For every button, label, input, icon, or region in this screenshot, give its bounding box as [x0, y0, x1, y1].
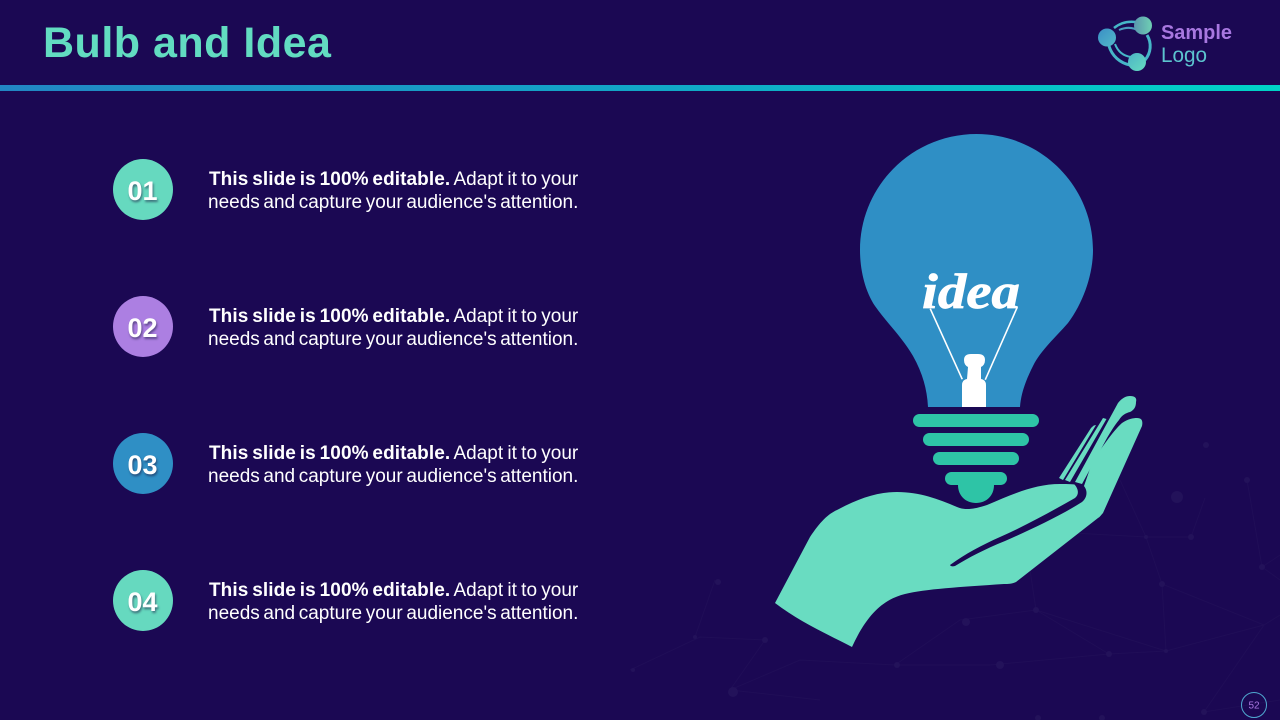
text 03: needs and capture your audience's attention.	[208, 466, 578, 487]
number badge 02: 02	[127, 313, 158, 343]
title: Bulb and Idea	[43, 19, 331, 67]
text 03: This slide is 100% editable. Adapt it to your	[209, 443, 578, 464]
item 04	[113, 570, 578, 631]
logo	[1098, 16, 1232, 71]
text 04: needs and capture your audience's attention.	[208, 603, 578, 624]
icon: light bulb glass	[860, 134, 1093, 407]
logo: Sample	[1161, 22, 1232, 44]
illustration: bulb and hand	[775, 134, 1142, 647]
idea lettering: idea	[922, 263, 1020, 319]
text 02: This slide is 100% editable. Adapt it to your	[209, 306, 578, 327]
icon: hand	[775, 396, 1142, 647]
number badge 03	[113, 433, 173, 494]
item 01	[113, 159, 578, 220]
number badge 02	[113, 296, 173, 357]
page number	[1241, 692, 1267, 718]
text 01: needs and capture your audience's attention.	[208, 192, 578, 213]
text 01	[208, 169, 578, 213]
text 04	[208, 580, 578, 624]
text 01: This slide is 100% editable. Adapt it to your	[209, 169, 578, 190]
number badge 04: 04	[127, 587, 158, 617]
header divider bar	[0, 85, 1280, 91]
hand thumb groove	[950, 484, 1086, 566]
item 03	[113, 433, 578, 494]
page number: 52	[1248, 700, 1260, 712]
text 02	[208, 306, 578, 350]
icon: bulb screw base	[913, 414, 1039, 503]
number badge 04	[113, 570, 173, 631]
number badge 01	[113, 159, 173, 220]
number badge 03: 03	[127, 450, 158, 480]
text 03	[208, 443, 578, 487]
logo: Logo	[1161, 44, 1207, 67]
number badge 01: 01	[127, 176, 158, 206]
icon: filament	[930, 307, 1018, 407]
text 04: This slide is 100% editable. Adapt it to your	[209, 580, 578, 601]
item 02	[113, 296, 578, 357]
text 02: needs and capture your audience's attention.	[208, 329, 578, 350]
